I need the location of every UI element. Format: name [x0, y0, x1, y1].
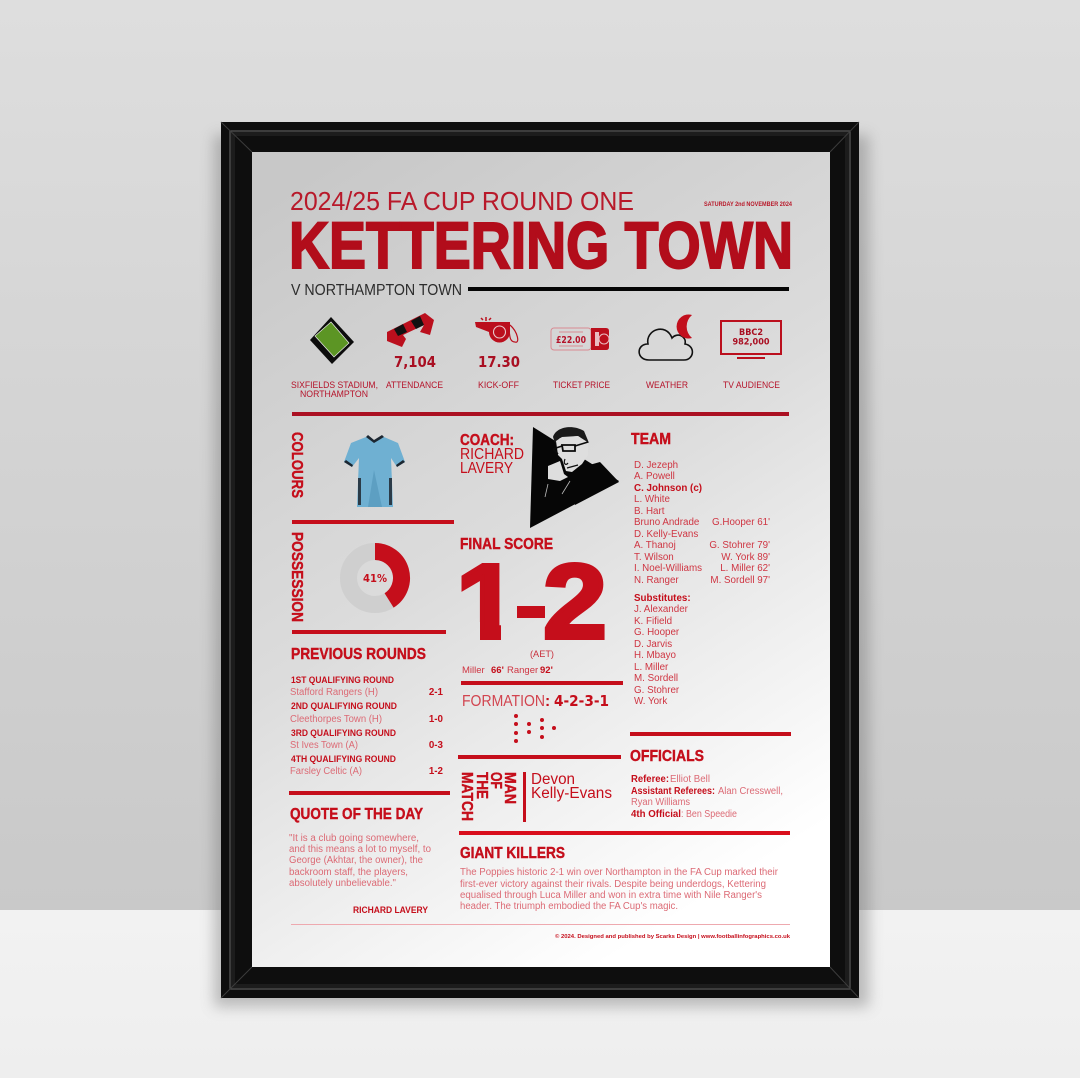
substitutions made: M. Sordell 97'	[710, 575, 770, 586]
icon: stadium	[310, 317, 354, 364]
officials list: Ryan Williams	[631, 797, 690, 808]
scorers: Miller	[462, 665, 485, 676]
stat: attendance: 7,104	[394, 353, 436, 371]
quote text: absolutely unbelievable."	[289, 878, 396, 889]
quote text: backroom staff, the players,	[289, 867, 408, 878]
coach portrait	[530, 427, 619, 528]
round 3	[290, 728, 444, 751]
substitutes list: Substitutes:	[634, 593, 691, 604]
stat labels: TICKET PRICE	[553, 380, 610, 390]
starting eleven: B. Hart	[634, 506, 665, 517]
substitutions made: G.Hooper 61'	[712, 517, 770, 528]
starting eleven: L. White	[634, 494, 670, 505]
vertical heading: THE	[473, 772, 490, 799]
footer credit: © 2024. Designed and published by Scarks Design | www.footballinfographics.co.uk	[555, 933, 791, 940]
article text: equalised through Luca Miller and won in extra time with Nile Ranger's	[460, 890, 762, 901]
substitutions made: L. Miller 62'	[720, 563, 770, 574]
panel: coach: LAVERY	[460, 460, 513, 477]
vertical heading	[458, 772, 518, 821]
panel: quote of the day	[289, 806, 431, 915]
panel: possession	[288, 532, 402, 622]
substitutes list: H. Mbayo	[634, 650, 676, 661]
formation heading: FORMATION	[462, 693, 545, 710]
score	[462, 562, 605, 640]
starting eleven: N. Ranger	[634, 575, 679, 586]
starting eleven: A. Powell	[634, 471, 675, 482]
starting eleven: A. Thanoj	[634, 540, 676, 551]
icon: tv audience: BBC2	[739, 328, 763, 338]
black rule	[468, 287, 789, 291]
stat labels: KICK-OFF	[478, 380, 519, 390]
stat: kick-off: 17.30	[478, 353, 520, 371]
formation dots	[514, 714, 556, 743]
article text: The Poppies historic 2-1 win over Northampton in the FA Cup marked their	[460, 867, 779, 878]
stat labels: TV AUDIENCE	[723, 380, 780, 390]
substitutions made: G. Stohrer 79'	[709, 540, 770, 551]
poster sheet	[252, 152, 830, 967]
substitutes list: W. York	[634, 696, 667, 707]
vertical heading: MATCH	[458, 772, 475, 821]
round 4: Farsley Celtic (A)	[290, 766, 362, 777]
icon: ticket	[551, 328, 609, 350]
icon: shirt	[344, 435, 405, 507]
score: 1	[456, 543, 518, 661]
panel: formation: 4-2-3-1	[554, 692, 609, 710]
stat labels: ATTENDANCE	[386, 380, 443, 390]
stat labels: NORTHAMPTON	[300, 389, 368, 399]
substitutes list: K. Fifield	[634, 616, 672, 627]
round 2: 1-0	[429, 714, 444, 725]
icon: whistle	[475, 317, 518, 342]
opponent: V NORTHAMPTON TOWN	[291, 282, 462, 299]
officials list: Alan Cresswell,	[718, 786, 783, 797]
coach name: RICHARD	[460, 446, 524, 463]
round 1	[290, 675, 444, 698]
officials list: Assistant Referees:	[631, 786, 715, 797]
officials list: 4th Official	[631, 809, 681, 820]
officials list: Referee:	[631, 774, 669, 785]
icon: tv audience: 982,000	[732, 338, 770, 348]
stat labels: WEATHER	[646, 380, 688, 390]
heading: colours: COLOURS	[288, 432, 305, 498]
round 3: 0-3	[429, 740, 444, 751]
heading: previous rounds: PREVIOUS ROUNDS	[291, 646, 426, 663]
starting eleven	[634, 460, 702, 586]
round 2	[290, 701, 444, 725]
donut chart: 41%	[363, 573, 387, 585]
substitutes list: J. Alexander	[634, 604, 689, 615]
panel: previous rounds	[290, 646, 444, 777]
picture frame	[221, 122, 859, 998]
team name: KETTERING TOWN	[289, 208, 793, 282]
coach heading: COACH:	[460, 432, 514, 449]
icon: scarf	[387, 313, 434, 347]
substitutes list: L. Miller	[634, 662, 669, 673]
panel: giant killers	[460, 845, 779, 912]
substitutions made	[709, 517, 770, 586]
heading: possession: POSSESSION	[288, 532, 305, 622]
icon: tv audience	[721, 321, 781, 359]
competition heading: 2024/25 FA CUP ROUND ONE	[290, 186, 634, 216]
stat labels	[291, 380, 780, 399]
round 3: 3RD QUALIFYING ROUND	[291, 728, 396, 738]
article text: first-ever victory against their rivals. Despite being underdogs, Kettering	[460, 879, 766, 890]
substitutes list: M. Sordell	[634, 673, 678, 684]
round 4: 4TH QUALIFYING ROUND	[291, 754, 396, 764]
quote text	[289, 833, 431, 889]
panel: team	[631, 431, 770, 707]
panel: coach	[460, 427, 619, 528]
panel: formation: :	[545, 693, 550, 710]
after extra time: (AET)	[530, 649, 554, 659]
panel: man of the match: Kelly-Evans	[531, 785, 612, 802]
starting eleven: C. Johnson (c)	[634, 483, 702, 494]
starting eleven: Bruno Andrade	[634, 517, 700, 528]
substitutes list: G. Stohrer	[634, 685, 680, 696]
scorers: 92'	[540, 665, 553, 676]
officials list: Elliot Bell	[670, 774, 710, 785]
round 4: 1-2	[429, 766, 444, 777]
starting eleven: I. Noel-Williams	[634, 563, 702, 574]
officials list	[631, 774, 783, 820]
starting eleven: D. Kelly-Evans	[634, 529, 698, 540]
heading: officials: OFFICIALS	[630, 748, 704, 765]
heading: final score: FINAL SCORE	[460, 536, 553, 553]
icon: weather	[639, 315, 692, 360]
round 1: 2-1	[429, 687, 444, 698]
heading: quote: QUOTE OF THE DAY	[290, 806, 424, 823]
scorers: 66'	[491, 665, 504, 676]
substitutes list: D. Jarvis	[634, 639, 672, 650]
heading: giant killers: GIANT KILLERS	[460, 845, 565, 862]
panel: formation	[462, 692, 609, 743]
panel: man of the match	[458, 771, 612, 822]
starting eleven: T. Wilson	[634, 552, 674, 563]
scorers: Ranger	[507, 665, 538, 676]
player name: Devon	[531, 771, 575, 788]
divider bar	[523, 772, 526, 822]
stat labels: SIXFIELDS STADIUM,	[291, 380, 378, 390]
substitutions made: W. York 89'	[721, 552, 770, 563]
quote attribution: RICHARD LAVERY	[353, 905, 428, 915]
round 2: Cleethorpes Town (H)	[290, 714, 382, 725]
round 1: Stafford Rangers (H)	[290, 687, 378, 698]
substitutes list	[634, 593, 691, 707]
article text	[460, 867, 779, 912]
scorers	[462, 665, 553, 676]
round 3: St Ives Town (A)	[290, 740, 358, 751]
heading: team: TEAM	[631, 431, 671, 448]
panel: officials	[630, 748, 783, 820]
round 2: 2ND QUALIFYING ROUND	[291, 701, 397, 711]
panel: colours	[288, 432, 405, 507]
quote text: "It is a club going somewhere,	[289, 833, 419, 844]
quote text: and this means a lot to myself, to	[289, 844, 431, 855]
article text: header. The triumph embodied the FA Cup's magic.	[460, 901, 678, 912]
round 1: 1ST QUALIFYING ROUND	[291, 675, 394, 685]
officials list: : Ben Speedie	[681, 809, 737, 820]
substitutes list: G. Hooper	[634, 627, 680, 638]
match date: SATURDAY 2nd NOVEMBER 2024	[704, 202, 793, 208]
vertical heading: OF	[487, 772, 504, 789]
panel: final score	[456, 536, 607, 676]
quote text: George (Akhtar, the owner), the	[289, 855, 423, 866]
vertical heading: MAN	[501, 772, 518, 804]
starting eleven: D. Jezeph	[634, 460, 678, 471]
icon: ticket: £22.00	[556, 335, 586, 346]
round 4	[290, 754, 444, 777]
score: 2	[543, 543, 607, 661]
title block	[289, 186, 793, 299]
